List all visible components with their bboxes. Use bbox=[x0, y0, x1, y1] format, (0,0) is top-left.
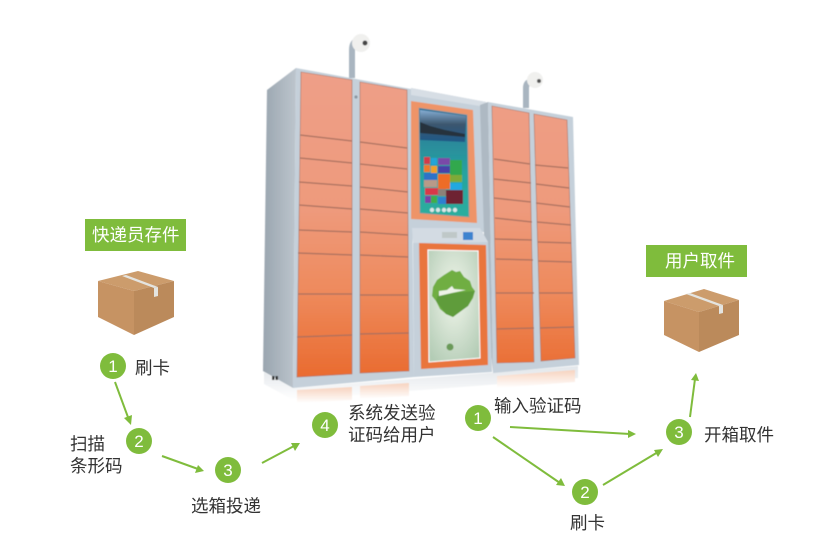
step 4: system sends verification code: 证码给用户 bbox=[348, 425, 436, 445]
step 2: scan barcode: 扫描 bbox=[70, 434, 105, 454]
locker doors: third column bbox=[492, 106, 534, 363]
icon: leaf bbox=[432, 270, 475, 317]
step 2: scan barcode bbox=[70, 428, 152, 476]
step 4: system sends verification code: 系统发送验 bbox=[348, 403, 436, 423]
step 3: select locker and deliver: 选箱投递 bbox=[191, 496, 261, 516]
left cabinet bbox=[263, 68, 414, 388]
arrow: step 1 to 2 bbox=[115, 382, 132, 425]
pickup step 2: swipe card: 2 bbox=[580, 483, 590, 502]
right cabinet bbox=[480, 102, 579, 373]
step 1: swipe card bbox=[100, 353, 170, 379]
arrow: pickup step 2 to 3 bbox=[603, 449, 663, 485]
pickup step 1: enter code: 1 bbox=[473, 409, 483, 428]
screen photo bbox=[420, 110, 466, 142]
step 2: scan barcode: 2 bbox=[134, 432, 144, 451]
center touch screen unit bbox=[411, 88, 486, 232]
step 2: scan barcode: 条形码 bbox=[70, 456, 122, 476]
locker doors: second column bbox=[360, 82, 409, 373]
pickup step 3: open locker and collect bbox=[666, 419, 774, 445]
locker cabinet bbox=[263, 34, 579, 403]
step 1: swipe card: 刷卡 bbox=[135, 358, 170, 378]
label: courier deposit bbox=[85, 219, 186, 251]
arrow: step 3 to 4 bbox=[262, 443, 300, 463]
label: user pickup bbox=[646, 245, 747, 277]
pickup step 3: open locker and collect: 开箱取件 bbox=[704, 425, 774, 445]
pickup step 2: swipe card: 刷卡 bbox=[570, 513, 605, 533]
step 3: select locker and deliver: 3 bbox=[223, 461, 233, 480]
step 1: swipe card: 1 bbox=[108, 357, 118, 376]
pickup step 2: swipe card bbox=[570, 479, 605, 533]
arrow: pickup step 3 to box bbox=[690, 373, 699, 417]
label: courier deposit: 快递员存件 bbox=[92, 225, 180, 245]
pickup step 1: enter code bbox=[465, 396, 582, 431]
icon: parcel box right bbox=[664, 289, 739, 352]
icon: parcel box left bbox=[98, 271, 174, 335]
pickup step 1: enter code: 输入验证码 bbox=[494, 396, 582, 416]
step 4: system sends verification code: 4 bbox=[320, 416, 330, 435]
arrow: pickup step 1 to 3 bbox=[510, 427, 636, 438]
step 3: select locker and deliver bbox=[191, 457, 261, 516]
locker doors: fourth column bbox=[534, 114, 575, 361]
arrow: pickup step 1 to 2 bbox=[493, 437, 565, 486]
arrow: step 2 to 3 bbox=[162, 456, 204, 473]
screen tiles bbox=[424, 157, 463, 212]
step 4: system sends verification code bbox=[312, 403, 436, 445]
locker doors: left column bbox=[297, 72, 352, 377]
pickup step 3: open locker and collect: 3 bbox=[674, 423, 684, 442]
label: user pickup: 用户取件 bbox=[665, 251, 735, 271]
floor reflection bbox=[264, 366, 578, 400]
camera: right bbox=[526, 72, 543, 108]
center lower kiosk bbox=[412, 228, 492, 377]
camera: left bbox=[352, 34, 370, 78]
